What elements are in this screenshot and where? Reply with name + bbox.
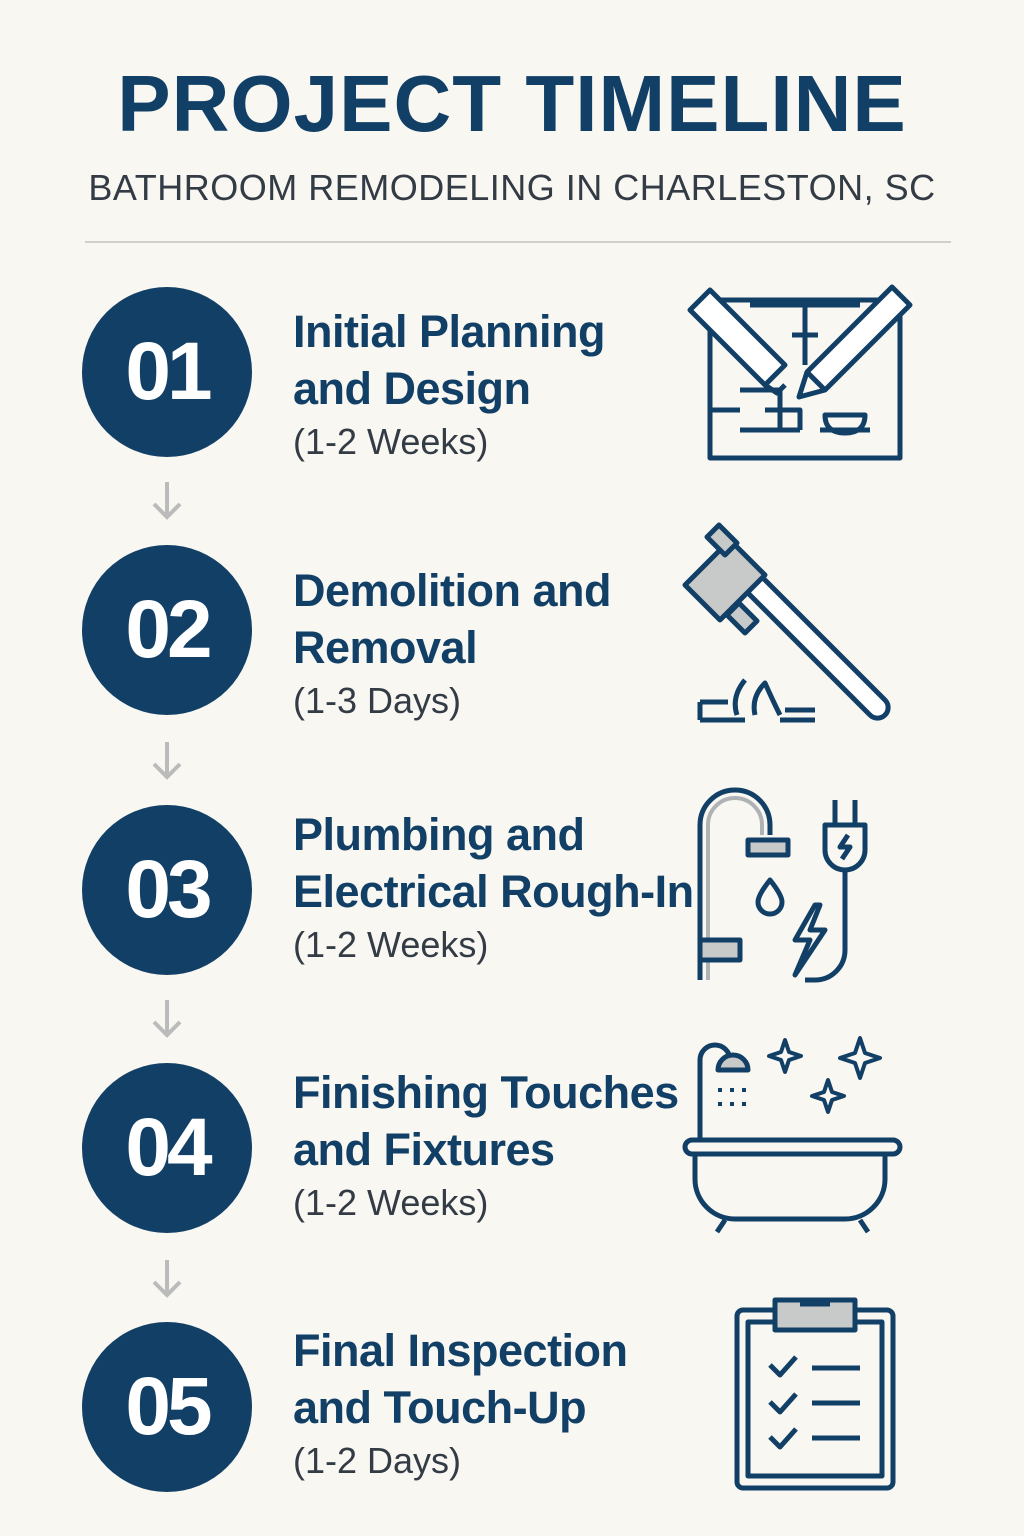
step 2 number: 02 [125, 584, 209, 675]
step 3 number: 03 [125, 844, 209, 935]
step 4 number [82, 1063, 252, 1233]
step 2 text [293, 565, 611, 721]
step 3 text: Plumbing and [293, 809, 584, 860]
step 5 text: (1-2 Days) [293, 1440, 461, 1481]
step 5 number [82, 1322, 252, 1492]
step 1 text: Initial Planning [293, 306, 605, 357]
step 4 text: (1-2 Weeks) [293, 1182, 488, 1223]
step 2 number [82, 545, 252, 715]
icon: blueprint with pencils [688, 284, 912, 460]
step 5 text [293, 1325, 628, 1481]
icon: bathtub with sparkles [682, 1036, 902, 1234]
step 1 text: (1-2 Weeks) [293, 421, 488, 462]
title: PROJECT TIMELINE [117, 59, 907, 148]
arrow [152, 1000, 182, 1038]
step 5 text: and Touch-Up [293, 1382, 586, 1433]
step 2 text: Demolition and [293, 565, 611, 616]
step 3 number [82, 805, 252, 975]
step 2 text: Removal [293, 622, 477, 673]
step 3 text: Electrical Rough-In [293, 866, 694, 917]
step 4 number: 04 [125, 1102, 209, 1193]
icon: clipboard checklist [734, 1298, 896, 1490]
step 5 number: 05 [125, 1361, 209, 1452]
step 5 text: Final Inspection [293, 1325, 628, 1376]
icon: hammer [682, 522, 891, 722]
step 2 text: (1-3 Days) [293, 680, 461, 721]
step 4 text [293, 1067, 679, 1223]
step 1 text: and Design [293, 363, 531, 414]
icon: faucet and plug [698, 788, 868, 982]
subtitle: BATHROOM REMODELING IN CHARLESTON, SC [88, 167, 936, 208]
arrow [152, 742, 182, 780]
arrow [152, 1260, 182, 1298]
step 3 text [293, 809, 694, 965]
step 4 text: Finishing Touches [293, 1067, 679, 1118]
step 1 number [82, 287, 252, 457]
step 1 number: 01 [125, 326, 209, 417]
step 1 text [293, 306, 605, 462]
arrow [152, 482, 182, 520]
step 4 text: and Fixtures [293, 1124, 555, 1175]
step 3 text: (1-2 Weeks) [293, 924, 488, 965]
